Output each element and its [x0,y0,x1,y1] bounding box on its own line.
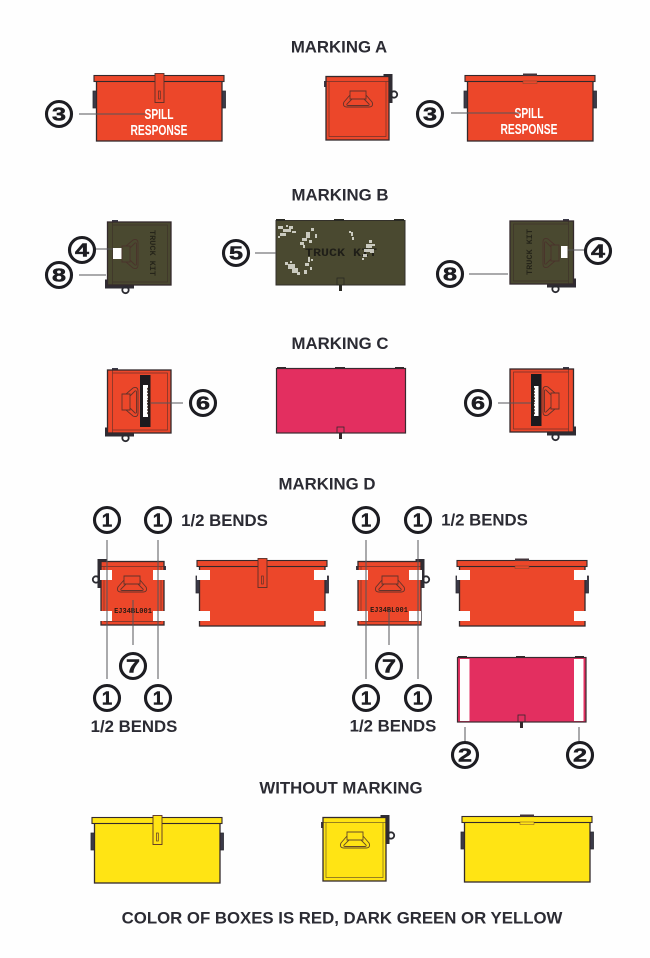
box: marking D right side with bends: EJ34BL001 [370,607,408,615]
box: marking C left side with label: EJ34BL001 [145,387,151,415]
label: right upper half bends: 1/2 BENDS [441,510,528,530]
callout: 4 left: 4 [75,240,90,260]
callout: 8 right: 8 [443,264,457,284]
box: marking D left front with bends [196,558,328,626]
label: right lower half bends: 1/2 BENDS [350,716,436,736]
box: marking B right side [510,219,576,292]
callout: 5: 5 [229,242,243,264]
callouts: left group bends [94,508,170,710]
callout: 4 right [568,238,610,264]
callouts: left group bends: 7 [126,656,140,676]
callout: 3 right [418,102,520,126]
callout: 8 right [438,262,508,286]
box: marking A rear with spill response [464,74,596,141]
heading: marking D: MARKING D [279,474,375,494]
box: marking B left side: TRUCK KIT [147,230,156,276]
callouts: right group bends [354,508,430,710]
heading: without marking: WITHOUT MARKING [259,778,423,798]
callouts: stripe width: 2 [458,744,472,766]
box: yellow side [321,815,394,881]
callouts: stripe width: 2 [573,744,587,766]
callouts: right group bends: 1 [413,510,423,530]
callouts: right group bends: 7 [382,656,396,676]
label: left upper half bends: 1/2 BENDS [181,511,268,530]
callout: 8 left: 8 [52,264,66,286]
box: marking C pink top [276,367,406,439]
box: marking C right side with label: EJ34BL001 [531,387,537,415]
callouts: left group bends: 1 [102,688,112,708]
callout: 3 right: 3 [423,104,437,124]
box: marking D right rear with bends [456,558,588,626]
box: marking B stencilled front [276,219,405,291]
box: marking C left side with label [105,368,171,441]
box: marking D left side with bends [93,559,166,625]
box: marking B right side: TRUCK KIT [526,229,535,275]
footer note: COLOR OF BOXES IS RED, DARK GREEN OR YELLOW [122,908,563,928]
callout: 4 left [70,238,113,262]
box: marking D left side with bends: EJ34BL001 [114,608,152,616]
heading: marking A: MARKING A [291,38,387,56]
callout: 5 [224,240,276,266]
callout: 6 right [466,390,531,416]
callout: 6 left: 6 [196,392,210,414]
box: marking D pink top with end stripes [458,656,586,728]
box: marking A front with spill response: SPILL [144,107,174,123]
callout: 4 right: 4 [591,240,606,262]
box: marking A front with spill response [93,74,226,141]
heading: marking C: MARKING C [292,334,388,353]
label: left lower half bends: 1/2 BENDS [91,717,177,736]
heading: marking B: MARKING B [292,186,388,204]
callouts: right group bends: 1 [361,510,371,530]
callout: 8 left [46,262,106,288]
callouts: right group bends: 1 [361,688,371,708]
paint chips [278,225,375,275]
callouts: left group bends: 1 [102,510,112,530]
box: yellow rear [461,814,594,882]
box: marking C right side with label [510,367,576,440]
callouts: stripe width [452,727,592,768]
box: marking D right side with bends [356,559,429,625]
callout: 6 right: 6 [471,392,485,414]
callouts: right group bends: 1 [413,688,423,708]
box: marking A side [324,74,397,140]
callout: 3 left [46,102,145,126]
box: marking A front with spill response: RESPONSE [130,123,188,139]
box: marking B stencilled front: TRUCK KIT [305,248,377,260]
box: marking A rear with spill response: RESPONSE [500,122,558,138]
callouts: left group bends: 1 [153,688,163,708]
box: marking A rear with spill response: SPILL [514,106,544,122]
callouts: left group bends: 1 [153,510,163,530]
callout: 6 left [151,390,216,416]
box: yellow front [91,816,224,883]
callout: 3 left: 3 [52,104,66,124]
box: marking B left side [105,220,171,293]
